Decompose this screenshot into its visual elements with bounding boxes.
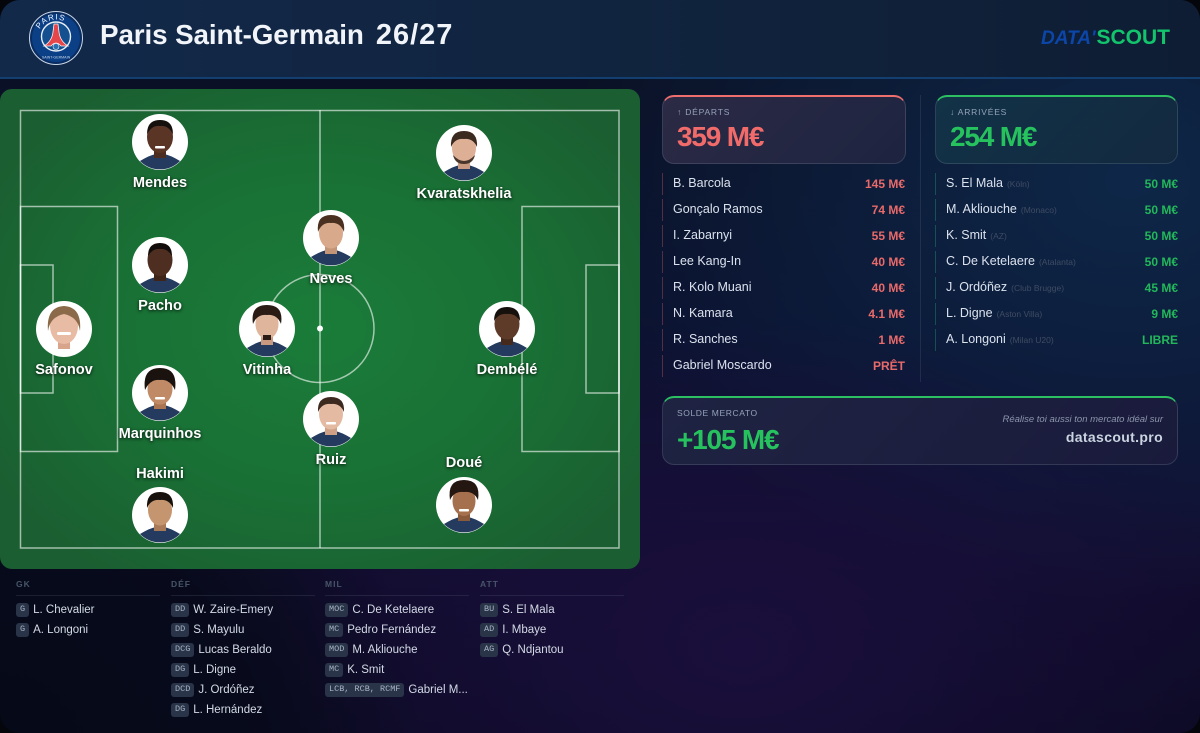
player row — [325, 603, 434, 617]
pitch markings — [20, 110, 620, 549]
value: départs: 359 M€ — [677, 121, 763, 152]
player row: AD — [484, 624, 494, 634]
transfer out: Sanches — [662, 329, 905, 351]
transfer out: Moscardo: PRÊT — [873, 359, 905, 373]
player row: Pedro Fernández — [347, 624, 436, 636]
player row: DCG — [175, 644, 190, 654]
player: Safonov — [34, 301, 94, 378]
transfer in: Akliouche: 50 M€ — [1145, 203, 1178, 217]
transfer out: Barcola — [662, 173, 905, 195]
player row: AG — [484, 644, 494, 654]
transfer in: Akliouche: M. Akliouche (Monaco) — [946, 202, 1057, 216]
transfer in: Ordóñez — [935, 277, 1178, 299]
squad column: DÉF — [171, 579, 315, 717]
player row: L. Digne — [193, 664, 236, 676]
player row: MC — [329, 664, 339, 674]
player row — [480, 643, 564, 657]
player row: W. Zaire-Emery — [193, 604, 273, 616]
label: solde: SOLDE MERCATO — [677, 408, 758, 418]
player: Marquinhos: Marquinhos — [119, 426, 201, 442]
transfer in: Smit — [935, 225, 1178, 247]
transfer in: Longoni — [935, 329, 1178, 351]
squad column: GK — [16, 579, 160, 637]
heading: DÉF: DÉF — [171, 579, 191, 589]
player row: J. Ordóñez — [198, 684, 255, 696]
call to action — [1002, 414, 1164, 445]
transfer in: Smit: K. Smit (AZ) — [946, 228, 1007, 242]
player row — [171, 603, 274, 617]
transfer out: Sanches: R. Sanches — [673, 332, 738, 346]
player row — [16, 623, 88, 637]
player row: DD — [175, 624, 185, 634]
transfer out: Lee Kang-In — [662, 251, 905, 273]
label: arrivées: ↓ ARRIVÉES — [950, 107, 1007, 117]
call to action: Réalise toi aussi ton mercato idéal sur — [1002, 414, 1163, 425]
arrivals list — [935, 173, 1178, 351]
player row: S. Mayulu — [193, 624, 244, 636]
transfer out: Zabarnyi: 55 M€ — [872, 229, 905, 243]
player row: I. Mbaye — [502, 624, 546, 636]
player row: Lucas Beraldo — [198, 644, 272, 656]
player: Doué — [436, 455, 492, 533]
football pitch — [0, 89, 640, 569]
player: Vitinha — [239, 301, 295, 378]
header band — [0, 0, 1200, 79]
player: Kvaratskhelia — [416, 125, 513, 202]
stat card: départs — [662, 95, 906, 164]
player: Safonov: Safonov — [35, 362, 93, 378]
transfer in: De Ketelaere: C. De Ketelaere (Atalanta) — [946, 254, 1076, 268]
player: Vitinha: Vitinha — [243, 362, 291, 378]
heading: MIL — [325, 578, 469, 596]
player row: M. Akliouche — [352, 644, 418, 656]
transfer in: Akliouche — [935, 199, 1178, 221]
transfer in: Longoni: LIBRE — [1142, 333, 1178, 347]
heading: MIL: MIL — [325, 579, 343, 589]
transfer out: Gonçalo Ramos: 74 M€ — [872, 203, 905, 217]
player row — [171, 623, 244, 637]
transfer out: Kamara: N. Kamara — [673, 306, 733, 320]
transfer out: Zabarnyi: I. Zabarnyi — [673, 228, 732, 242]
player row: BU — [484, 604, 494, 614]
call to action: datascout.pro — [1066, 429, 1163, 445]
player row — [16, 603, 94, 617]
transfer in: De Ketelaere: 50 M€ — [1145, 255, 1178, 269]
transfer in: Digne — [935, 303, 1178, 325]
transfer in: Digne: L. Digne (Aston Villa) — [946, 306, 1042, 320]
player row — [325, 683, 468, 697]
player: Marquinhos — [117, 365, 202, 444]
player row: S. El Mala — [502, 604, 555, 616]
transfer out: Gonçalo Ramos — [662, 199, 905, 221]
heading: GK — [16, 578, 160, 596]
transfer out: Lee Kang-In: 40 M€ — [872, 255, 905, 269]
label: départs: ↑ DÉPARTS — [677, 107, 730, 117]
player: Hakimi: Hakimi — [136, 466, 184, 482]
player row — [171, 643, 272, 657]
transfer in: Longoni: A. Longoni (Milan U20) — [946, 332, 1054, 346]
player: Neves — [303, 210, 359, 287]
transfer out: Sanches: 1 M€ — [878, 333, 905, 347]
transfer in: El Mala: 50 M€ — [1145, 177, 1178, 191]
transfer out: Kolo Muani: R. Kolo Muani — [673, 280, 752, 294]
player row: A. Longoni — [33, 624, 88, 636]
player row: K. Smit — [347, 664, 384, 676]
player row: Gabriel M... — [408, 684, 468, 696]
heading: GK: GK — [16, 579, 31, 589]
player row — [480, 623, 546, 637]
player row — [171, 703, 262, 717]
squad column: MIL — [325, 579, 469, 697]
player: Kvaratskhelia: Kvaratskhelia — [417, 186, 511, 202]
value: solde: +105 M€ — [677, 424, 778, 455]
player row: C. De Ketelaere — [352, 604, 434, 616]
player row: MOC — [329, 604, 344, 614]
transfer in: El Mala — [935, 173, 1178, 195]
player: Dembélé — [476, 301, 538, 378]
transfer out: Barcola: B. Barcola — [673, 176, 731, 190]
heading: DÉF — [171, 578, 315, 596]
icon: PSG crest — [29, 11, 83, 65]
icon: PSG crest: PARIS — [36, 14, 65, 29]
icon: PSG crest: SAINT-GERMAIN — [42, 56, 71, 60]
player row: Q. Ndjantou — [502, 644, 564, 656]
player row: LCB, RCB, RCMF — [329, 684, 400, 694]
player: Neves: Neves — [309, 271, 352, 287]
player row: MC — [329, 624, 339, 634]
value: arrivées: 254 M€ — [950, 121, 1036, 152]
player: Hakimi — [132, 466, 188, 543]
transfer in: Ordóñez: 45 M€ — [1145, 281, 1178, 295]
transfer in: El Mala: S. El Mala (Köln) — [946, 176, 1030, 190]
player row — [480, 603, 555, 617]
player row: DG — [175, 704, 185, 714]
logo: DataScout: DATA'SCOUT — [1041, 26, 1170, 49]
player row: G — [20, 604, 25, 614]
player: Doué: Doué — [446, 455, 482, 471]
heading: ATT: ATT — [480, 579, 499, 589]
title: Paris Saint-Germain 26/27 — [100, 19, 453, 51]
player row: DG — [175, 664, 185, 674]
player: Mendes — [132, 114, 188, 191]
player row: DD — [175, 604, 185, 614]
transfer out: Kamara: 4.1 M€ — [868, 307, 905, 321]
transfer out: Kamara — [662, 303, 905, 325]
stat card: arrivées — [935, 95, 1178, 164]
player row: L. Chevalier — [33, 604, 94, 616]
departures list — [662, 173, 905, 377]
player row — [325, 643, 418, 657]
player: Pacho: Pacho — [138, 298, 182, 314]
panel: solde mercato — [662, 396, 1178, 465]
player row — [171, 683, 255, 697]
transfer out: Moscardo — [662, 355, 905, 377]
transfer out: Moscardo: Gabriel Moscardo — [673, 358, 772, 372]
player: Ruiz: Ruiz — [316, 452, 346, 468]
player row: MOD — [329, 644, 344, 654]
player: Dembélé: Dembélé — [477, 362, 537, 378]
player row — [171, 663, 236, 677]
heading: ATT — [480, 578, 624, 596]
player: Pacho — [132, 237, 188, 314]
player row: L. Hernández — [193, 704, 262, 716]
player row — [325, 663, 384, 677]
transfer out: Barcola: 145 M€ — [865, 177, 905, 191]
transfer out: Lee Kang-In: Lee Kang-In — [673, 254, 741, 268]
player row: G — [20, 624, 25, 634]
player row: DCD — [175, 684, 190, 694]
player: Mendes: Mendes — [133, 175, 187, 191]
squad column: ATT — [480, 579, 624, 657]
transfer in: De Ketelaere — [935, 251, 1178, 273]
player: Ruiz — [303, 391, 359, 468]
transfer in: Ordóñez: J. Ordóñez (Club Brugge) — [946, 280, 1064, 294]
transfer in: Digne: 9 M€ — [1151, 307, 1178, 321]
transfer in: Smit: 50 M€ — [1145, 229, 1178, 243]
transfer out: Kolo Muani — [662, 277, 905, 299]
player row — [325, 623, 436, 637]
transfer out: Kolo Muani: 40 M€ — [872, 281, 905, 295]
transfer out: Zabarnyi — [662, 225, 905, 247]
transfer out: Gonçalo Ramos: Gonçalo Ramos — [673, 202, 763, 216]
